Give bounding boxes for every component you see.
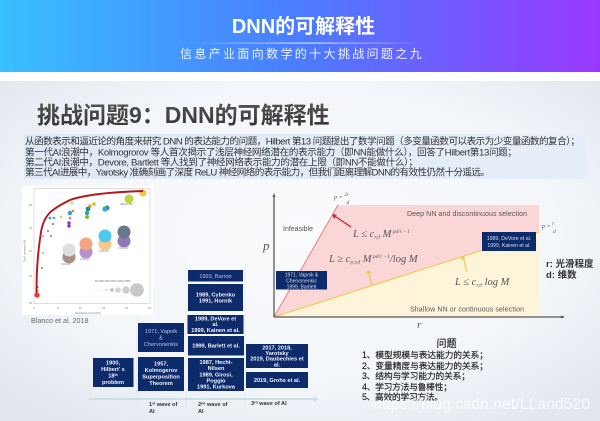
yellow arrow right	[461, 257, 467, 272]
research timeline	[89, 263, 318, 415]
box: DeVore Kainen: al.	[212, 322, 219, 328]
box: Vapnik Bartlett note: 1971, Vapnik &	[285, 272, 319, 278]
box: Hecht-Nilsen Girosi Kurkova: 1989, Girosi,	[199, 372, 233, 378]
formula upper bound deep: M	[380, 229, 393, 240]
axis label p: p	[262, 238, 270, 253]
wave labels: AI	[198, 409, 204, 415]
box: 1971 Vapnik: 1971, Vapnik	[145, 329, 177, 335]
timeline guides	[137, 263, 245, 409]
size legend: 5M 35M 65M 95M 125M 155M	[95, 279, 130, 283]
y axis ticks: 70	[29, 249, 32, 253]
watermark: https://blog.csdn.net/LLand520	[373, 396, 590, 413]
formula upper bound shallow: L ≤ c	[455, 277, 476, 288]
box: Grohs: 2019, Grohs et al.	[254, 378, 301, 384]
legend: r and d: d: 维数	[546, 269, 577, 281]
wave labels: AI	[149, 409, 155, 415]
box: 1900 Hilbert: 18	[108, 374, 114, 380]
box: 1987 Kolmogorov	[138, 357, 184, 391]
boundary label 2r/d: p =	[334, 195, 343, 201]
x axis ticks	[33, 306, 151, 310]
y axis ticks	[29, 203, 32, 305]
problems heading: 问题	[436, 337, 456, 350]
wave labels: nd	[201, 402, 205, 406]
large bubbles: VGG-19	[118, 246, 128, 250]
box: 1900 Hilbert: problem	[102, 380, 124, 386]
x axis label: Operations [G-FLOPs]	[75, 311, 101, 315]
legend: r and d: r: 光滑程度	[546, 258, 594, 270]
intro text block: 从函数表示和逼近论的角度来研究 DNN 的表达能力的问题，Hilbert 第13 问题提出了数学问题（多变量函数可以表示为少变量函数的复合）；	[25, 136, 580, 148]
box: Bartlett	[188, 336, 244, 356]
box: Vapnik Bartlett note	[276, 271, 327, 290]
large bubbles: SENet-154	[120, 202, 133, 206]
box: Yarotsky Daubechies: 2019, Daubechies et	[250, 356, 304, 362]
box: Cybenko Hornik: 1989, Cybenko	[196, 292, 236, 298]
box: 1900 Hilbert	[93, 358, 134, 387]
x axis ticks: 20	[125, 306, 128, 310]
intro text block: 第二代AI浪潮中，Devore, Bartlett 等人找到了神经网络表示能力的潜在上限（即NN不能做什么）；	[25, 156, 418, 168]
wave labels: rd	[254, 400, 258, 404]
y axis ticks: 75	[29, 226, 32, 230]
wave labels	[149, 400, 287, 415]
wave labels: st	[152, 402, 156, 406]
wave labels: 3	[251, 401, 254, 407]
approximation region diagram: d	[553, 229, 556, 235]
box: DeVore Kainen: 1989, DeVore et	[195, 316, 236, 322]
box: 1987 Kolmogorov: Theorem	[149, 381, 173, 387]
problems list: 5、高效的学习方法。	[362, 391, 443, 402]
large bubbles: VGG-16	[99, 249, 109, 253]
header subtitle: 信息产业面向数学的十大挑战问题之九	[180, 46, 424, 61]
box: Hecht-Nilsen Girosi Kurkova	[188, 358, 244, 391]
wave labels: wave of	[205, 402, 228, 408]
box: Bartlett: 1999, Barlett et al.	[192, 344, 240, 350]
formula lower bound: p,r,d	[349, 260, 360, 266]
box: 1987 Kolmogorov: Superposition	[142, 374, 180, 380]
intro text block: 第一代AI浪潮中，Kolmogrorov 等人首次揭示了浅层神经网络潜在的表示能力（即NN能做什么），回答了Hilbert第13问题；	[25, 146, 517, 158]
box: DeVore Kainen: 1999, Kainen et al.	[191, 328, 240, 334]
box: Yarotsky Daubechies: Yarotsky	[265, 351, 290, 357]
region label shallow: Shallow NN or continuous selection	[410, 306, 524, 314]
box: Vapnik Bartlett note: 1999, Bartlett	[287, 284, 317, 290]
region label infeasible: Infeasible	[283, 226, 313, 233]
problems list: 3、结构与学习能力的关系；	[362, 370, 470, 381]
formula upper bound shallow: r,d	[476, 282, 482, 288]
slide title: 挑战问题9：DNN的可解释性	[37, 102, 330, 128]
formula upper bound deep: L ≤ c	[353, 229, 374, 240]
y axis ticks: 80	[29, 203, 32, 207]
box: Cybenko Hornik: 1991, Hornik	[199, 298, 233, 304]
intro text block	[24, 134, 587, 179]
formula lower bound: /log M	[389, 254, 419, 265]
wave labels: wave of AI	[258, 401, 287, 407]
problems list: 1、模型规模与表达能力的关系；	[362, 349, 488, 360]
x axis ticks: 10	[79, 306, 82, 310]
red arrow	[333, 215, 351, 227]
wave labels: 1	[149, 402, 152, 408]
box: DeVore Kainen note	[482, 232, 536, 251]
x axis ticks: 15	[102, 306, 105, 310]
box: 1900 Hilbert: Hilbert’ s	[101, 367, 125, 373]
axis label r: r	[417, 319, 422, 331]
box: Hecht-Nilsen Girosi Kurkova: 1991, Kurkova	[197, 384, 236, 390]
x axis ticks: 0	[33, 306, 35, 310]
y axis ticks: 60	[29, 301, 32, 305]
box: 1971 Vapnik: Chervonenkis	[144, 342, 178, 348]
p = r/d boundary	[274, 232, 539, 317]
box: Cybenko Hornik	[188, 284, 243, 311]
box: Hecht-Nilsen Girosi Kurkova: 1987, Hecht-	[200, 360, 233, 366]
approximation region diagram: d	[346, 200, 350, 206]
y axis ticks: 65	[29, 274, 32, 278]
deep region	[274, 205, 539, 317]
formula upper bound deep: r,d	[374, 234, 380, 240]
large bubbles	[61, 190, 146, 266]
shallow region	[274, 232, 539, 317]
bubble chart: accuracy vs operations	[22, 186, 153, 315]
chart citation: Blanco et al. 2018	[31, 316, 89, 325]
problems list: 2、变量精度与表达能力的关系；	[362, 360, 488, 371]
p = 2r/d boundary	[274, 205, 338, 317]
large bubbles: VGG-13	[80, 257, 90, 261]
formula upper bound shallow: log M	[482, 277, 511, 288]
box: 1987 Kolmogorov: Kolmogerov	[145, 368, 178, 374]
problems list: 4、学习方法与鲁棒性；	[362, 381, 452, 392]
region label deep: Deep NN and discontinuous selection	[407, 211, 527, 218]
box: DeVore Kainen note: 1999, Kainen et al.	[487, 243, 531, 249]
box: 1971 Vapnik	[138, 323, 184, 352]
formula lower bound: L ≥ c	[329, 254, 350, 265]
accuracy frontier curve	[36, 191, 143, 295]
header banner	[0, 0, 600, 72]
box: Grohs	[246, 372, 308, 388]
box: 1900 Hilbert: th	[114, 373, 118, 377]
box: Yarotsky Daubechies: al.	[274, 362, 281, 368]
formula upper bound deep: pd/r −1	[391, 229, 410, 235]
boundary label r/d: p =	[542, 224, 551, 230]
approximation region diagram	[262, 192, 565, 331]
boundary label 2r/d: 2r	[344, 192, 350, 198]
box: 1900 Hilbert: 1900,	[106, 360, 120, 366]
small bubbles	[37, 201, 110, 292]
wave labels: wave of	[155, 402, 177, 408]
wave labels: 2	[198, 402, 201, 408]
formula lower bound: M	[360, 254, 373, 265]
formula lower bound: pd/r −1	[371, 254, 390, 260]
axes	[272, 193, 565, 318]
box: Yarotsky Daubechies: 2017, 2018,	[262, 346, 292, 352]
box: 1993 Barron: 1993, Barron	[199, 274, 232, 280]
box: Hecht-Nilsen Girosi Kurkova: Nilsen	[208, 366, 225, 372]
box: 1993 Barron	[188, 270, 243, 282]
timeline arrow	[89, 396, 318, 402]
box: Hecht-Nilsen Girosi Kurkova: Poggio	[207, 378, 226, 384]
box: Vapnik Bartlett note: Chervonenkis	[286, 278, 317, 284]
legend: r and d	[546, 258, 594, 281]
box: 1987 Kolmogorov: 1957,	[154, 362, 168, 368]
boundary label r/d: r	[552, 221, 555, 227]
box: Yarotsky Daubechies	[246, 344, 308, 368]
box: 1971 Vapnik: &	[159, 336, 163, 342]
intro text block: 第三代AI进展中，Yarotsky 准确刻画了深度 ReLU 神经网络的表示能力，但我们距离理解DNN的有效性仍然十分遥远。	[25, 166, 490, 178]
header title: DNN的可解释性	[232, 15, 375, 38]
x axis ticks: 25	[148, 306, 151, 310]
x axis ticks: 5	[57, 306, 59, 310]
box: DeVore Kainen	[188, 315, 244, 334]
yellow arrow left	[366, 271, 372, 285]
box: DeVore Kainen note: 1989, DeVore et al.	[487, 236, 531, 242]
large bubbles: VGG-11	[61, 262, 71, 266]
problems list	[362, 337, 488, 402]
slide content	[22, 102, 594, 415]
y axis label: Top-1 accuracy [%]	[22, 240, 26, 262]
